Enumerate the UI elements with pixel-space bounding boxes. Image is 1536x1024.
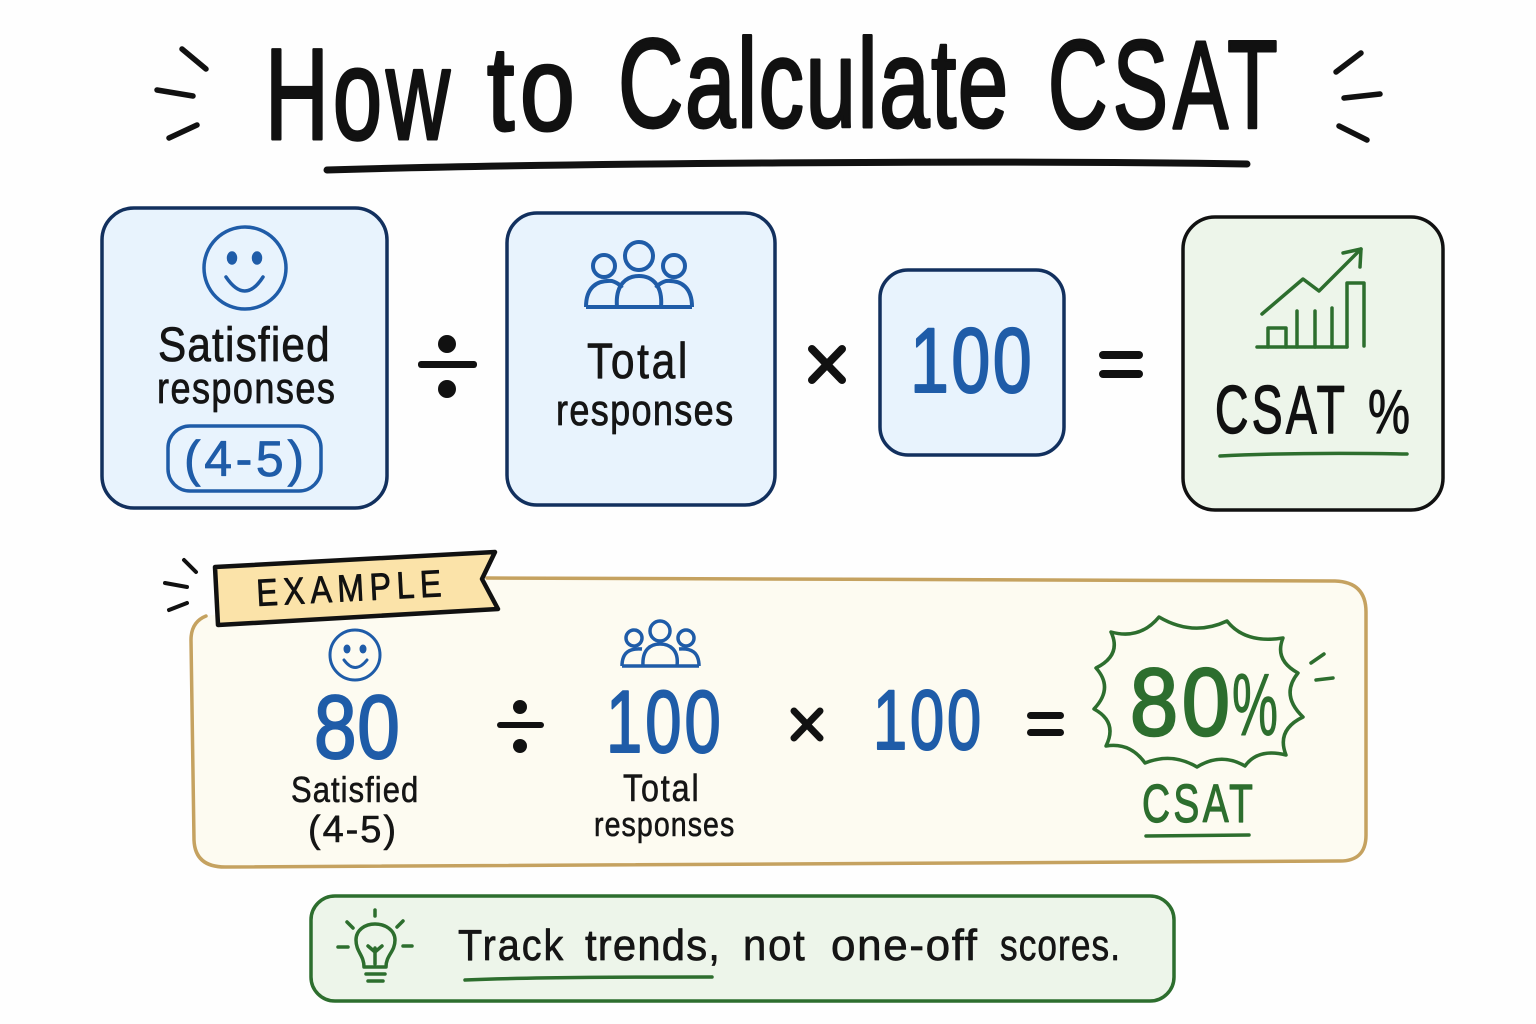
label: total responses: [594, 768, 734, 844]
ribbon: EXAMPLE: EXAMPLE: [255, 563, 442, 615]
icon: light bulb: [338, 910, 412, 981]
divide sign: [418, 335, 477, 398]
panel: 100: 100: [910, 310, 1032, 412]
label: total responses: Total: [623, 768, 699, 810]
tip underline: [465, 977, 712, 980]
underline: [1220, 453, 1407, 456]
multiply sign: [812, 349, 842, 380]
title: Calculate: [618, 15, 1008, 155]
panel: example: [165, 552, 1366, 867]
icon: people: [586, 242, 692, 307]
label: CSAT: CSAT: [1142, 773, 1253, 833]
badge: 80%: [1094, 617, 1303, 767]
tip text: trends,: [585, 921, 720, 970]
title underline: [327, 162, 1247, 170]
divide sign: [497, 700, 544, 753]
panel: total responses: [507, 213, 775, 505]
CSAT underline: [1146, 835, 1249, 836]
ribbon: EXAMPLE: [215, 552, 498, 625]
label: satisfied 4-5: Satisfied: [291, 771, 418, 811]
title sparks right: [1336, 53, 1380, 140]
tip text: not: [743, 921, 805, 970]
tip text: [458, 920, 1120, 970]
label: satisfied 4-5: (4-5): [308, 809, 396, 851]
multiply sign: [794, 711, 820, 738]
panel: tip: [311, 896, 1174, 1001]
label: total responses: Total: [587, 333, 687, 389]
example sparks: [165, 560, 196, 610]
label: CSAT %: [1215, 372, 1410, 448]
title: to: [487, 23, 575, 156]
number: 100 total: 100: [606, 674, 721, 771]
label: CSAT %: %: [1368, 378, 1410, 447]
label: total responses: [556, 333, 733, 435]
tip text: scores.: [1000, 921, 1120, 970]
icon: smiley: [204, 227, 286, 309]
title sparks left: [157, 49, 206, 138]
panel: 100: [880, 270, 1064, 455]
badge sparks: [1311, 654, 1333, 680]
equals sign: [1099, 351, 1143, 378]
label: total responses: responses: [594, 806, 734, 844]
tip text: Track: [458, 920, 563, 969]
badge: 80%: 80: [1130, 649, 1230, 756]
icon: small people: [622, 621, 699, 666]
label: satisfied responses: responses: [157, 364, 335, 413]
label: satisfied 4-5: [291, 771, 418, 851]
badge: 80%: %: [1232, 655, 1278, 754]
title: How: [265, 21, 451, 167]
panel: CSAT %: [1183, 217, 1443, 510]
equals sign: [1027, 712, 1064, 736]
title: [265, 15, 1278, 170]
pill: 4-5: [168, 426, 321, 491]
panel: satisfied responses: [102, 208, 387, 508]
title: CSAT: [1048, 16, 1278, 155]
pill: 4-5: (4-5): [184, 431, 304, 487]
tip text: one-off: [831, 921, 978, 970]
icon: small smiley: [330, 630, 380, 680]
label: satisfied responses: Satisfied: [158, 317, 330, 372]
icon: growth chart: [1257, 249, 1364, 347]
number: 100: 100: [873, 672, 981, 767]
label: satisfied responses: [157, 317, 335, 413]
label: total responses: responses: [556, 386, 733, 435]
label: CSAT %: CSAT: [1215, 372, 1345, 448]
number: 80: 80: [314, 676, 400, 777]
